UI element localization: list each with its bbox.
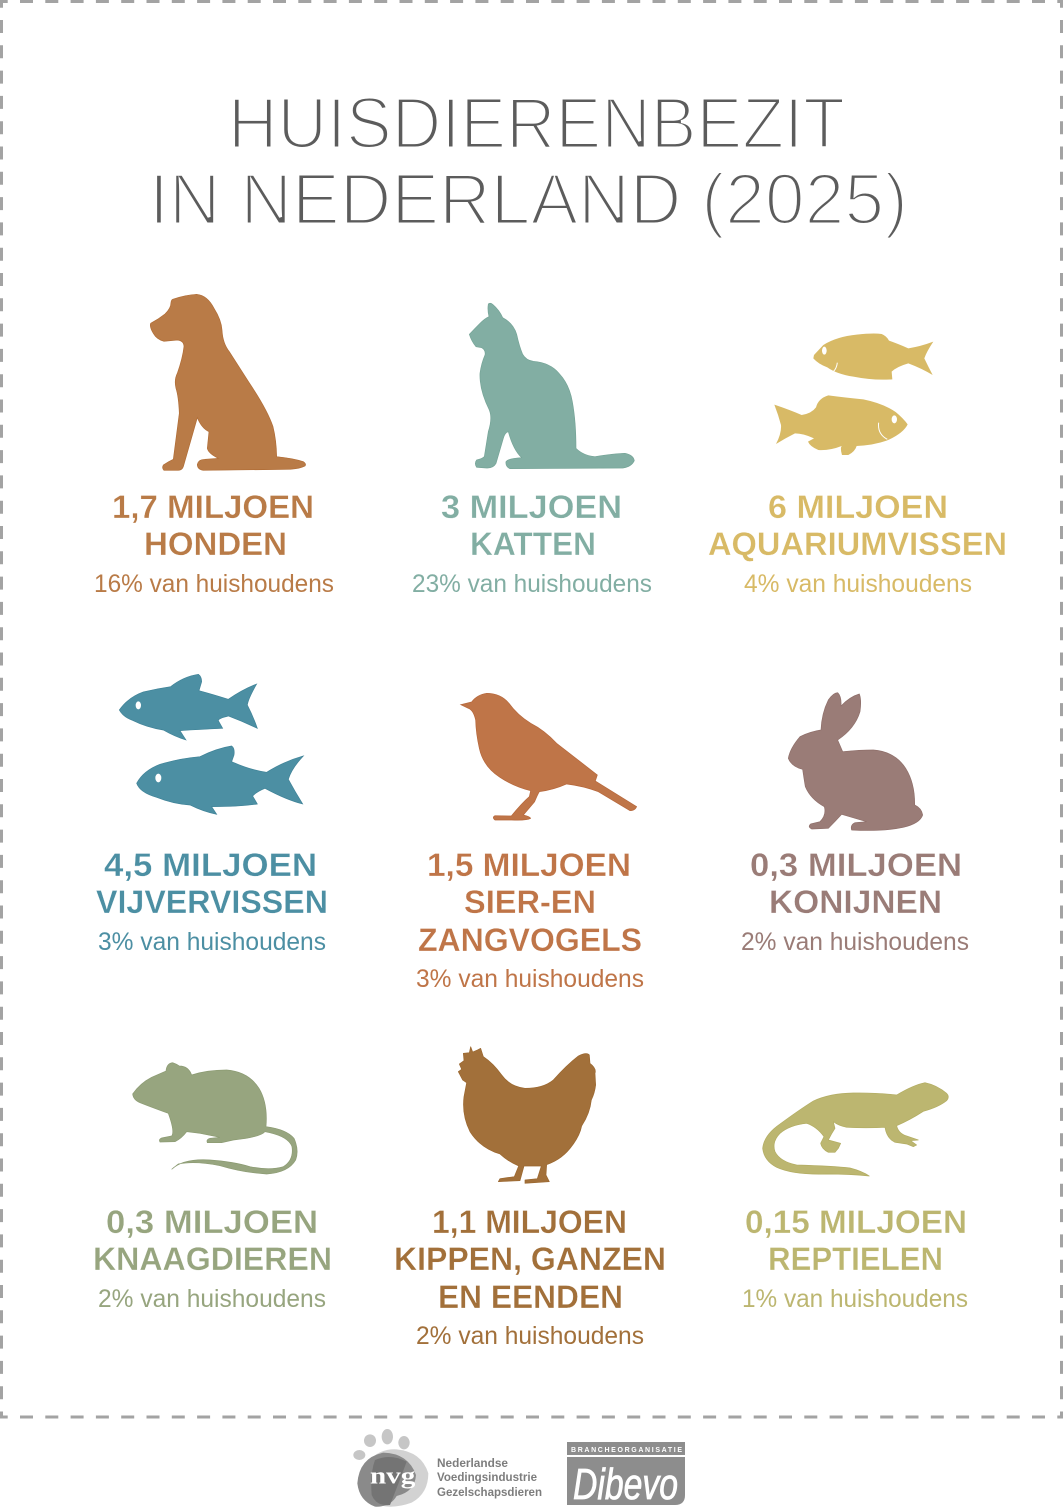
icon: nvg paw: nvg bbox=[370, 1463, 415, 1489]
label: honden: 16% van huishoudens bbox=[94, 570, 334, 598]
label: knaagdieren bbox=[93, 1204, 332, 1313]
label: katten: KATTEN bbox=[470, 526, 596, 562]
label: reptielen: 1% van huishoudens bbox=[742, 1285, 968, 1313]
icon: yellow fish bbox=[774, 333, 933, 455]
label: konijnen: 2% van huishoudens bbox=[741, 928, 969, 956]
title bbox=[149, 84, 908, 240]
panel: katten bbox=[412, 303, 652, 598]
label: vijvervissen bbox=[96, 847, 328, 956]
label: konijnen: KONIJNEN bbox=[769, 884, 942, 920]
label: reptielen bbox=[742, 1204, 968, 1313]
panel: konijnen bbox=[741, 693, 969, 956]
text: nvg name: Gezelschapsdieren bbox=[437, 1487, 542, 1499]
logo: Dibevo bbox=[567, 1442, 685, 1509]
logo: Dibevo: BRANCHEORGANISATIE bbox=[571, 1447, 682, 1454]
label: honden: HONDEN bbox=[144, 526, 287, 562]
label: katten: 23% van huishoudens bbox=[412, 570, 652, 598]
label: vijvervissen: VIJVERVISSEN bbox=[96, 884, 328, 920]
panel: aquariumvissen bbox=[708, 333, 1007, 598]
label: sier- en zangvogels: 1,5 MILJOEN bbox=[427, 847, 631, 883]
label: sier- en zangvogels: SIER-EN bbox=[464, 884, 596, 920]
icon: dog bbox=[150, 294, 306, 470]
label: reptielen: REPTIELEN bbox=[768, 1241, 943, 1277]
label: knaagdieren: KNAAGDIEREN bbox=[93, 1241, 332, 1277]
label: knaagdieren: 2% van huishoudens bbox=[98, 1285, 326, 1313]
label: kippen, ganzen en eenden: EN EENDEN bbox=[438, 1279, 623, 1315]
label: kippen, ganzen en eenden: 2% van huishoudens bbox=[416, 1322, 644, 1350]
label: sier- en zangvogels bbox=[416, 847, 644, 993]
title: HUISDIERENBEZIT bbox=[228, 84, 845, 164]
logo: nvg bbox=[353, 1429, 542, 1507]
title: IN NEDERLAND (2025) bbox=[149, 160, 908, 240]
icon: nvg paw bbox=[353, 1429, 428, 1507]
label: konijnen bbox=[741, 847, 969, 956]
label: vijvervissen: 4,5 MILJOEN bbox=[104, 847, 317, 883]
panel: knaagdieren bbox=[93, 1063, 332, 1313]
label: sier- en zangvogels: 3% van huishoudens bbox=[416, 965, 644, 993]
label: katten: 3 MILJOEN bbox=[441, 489, 622, 525]
icon: rabbit bbox=[788, 693, 923, 830]
label: aquariumvissen: 6 MILJOEN bbox=[768, 489, 948, 525]
label: aquariumvissen: 4% van huishoudens bbox=[744, 570, 972, 598]
text: nvg name: Voedingsindustrie bbox=[437, 1472, 537, 1484]
icon: teal fish bbox=[119, 674, 303, 814]
label: konijnen: 0,3 MILJOEN bbox=[750, 847, 962, 883]
panel: vijvervissen bbox=[96, 674, 328, 956]
panel: kippen, ganzen en eenden bbox=[394, 1047, 666, 1350]
label: knaagdieren: 0,3 MILJOEN bbox=[106, 1204, 318, 1240]
panel: honden bbox=[94, 294, 334, 598]
panel: sier- en zangvogels bbox=[416, 693, 644, 993]
icon: hen bbox=[458, 1047, 596, 1183]
icon: mouse bbox=[133, 1063, 297, 1174]
text: nvg name bbox=[437, 1458, 542, 1499]
icon: bird bbox=[461, 693, 637, 820]
label: reptielen: 0,15 MILJOEN bbox=[745, 1204, 967, 1240]
label: katten bbox=[412, 489, 652, 598]
label: kippen, ganzen en eenden: KIPPEN, GANZEN bbox=[394, 1241, 666, 1277]
icon: lizard bbox=[763, 1083, 948, 1176]
logo: Dibevo: Dibevo bbox=[573, 1460, 678, 1509]
label: kippen, ganzen en eenden bbox=[394, 1204, 666, 1350]
label: aquariumvissen bbox=[708, 489, 1007, 598]
label: honden: 1,7 MILJOEN bbox=[112, 489, 314, 525]
label: vijvervissen: 3% van huishoudens bbox=[98, 928, 326, 956]
label: sier- en zangvogels: ZANGVOGELS bbox=[418, 922, 642, 958]
label: aquariumvissen: AQUARIUMVISSEN bbox=[708, 526, 1007, 562]
text: nvg name: Nederlandse bbox=[437, 1458, 508, 1470]
panel: reptielen bbox=[742, 1083, 968, 1313]
icon: cat bbox=[469, 303, 634, 469]
label: honden bbox=[94, 489, 334, 598]
label: kippen, ganzen en eenden: 1,1 MILJOEN bbox=[432, 1204, 627, 1240]
